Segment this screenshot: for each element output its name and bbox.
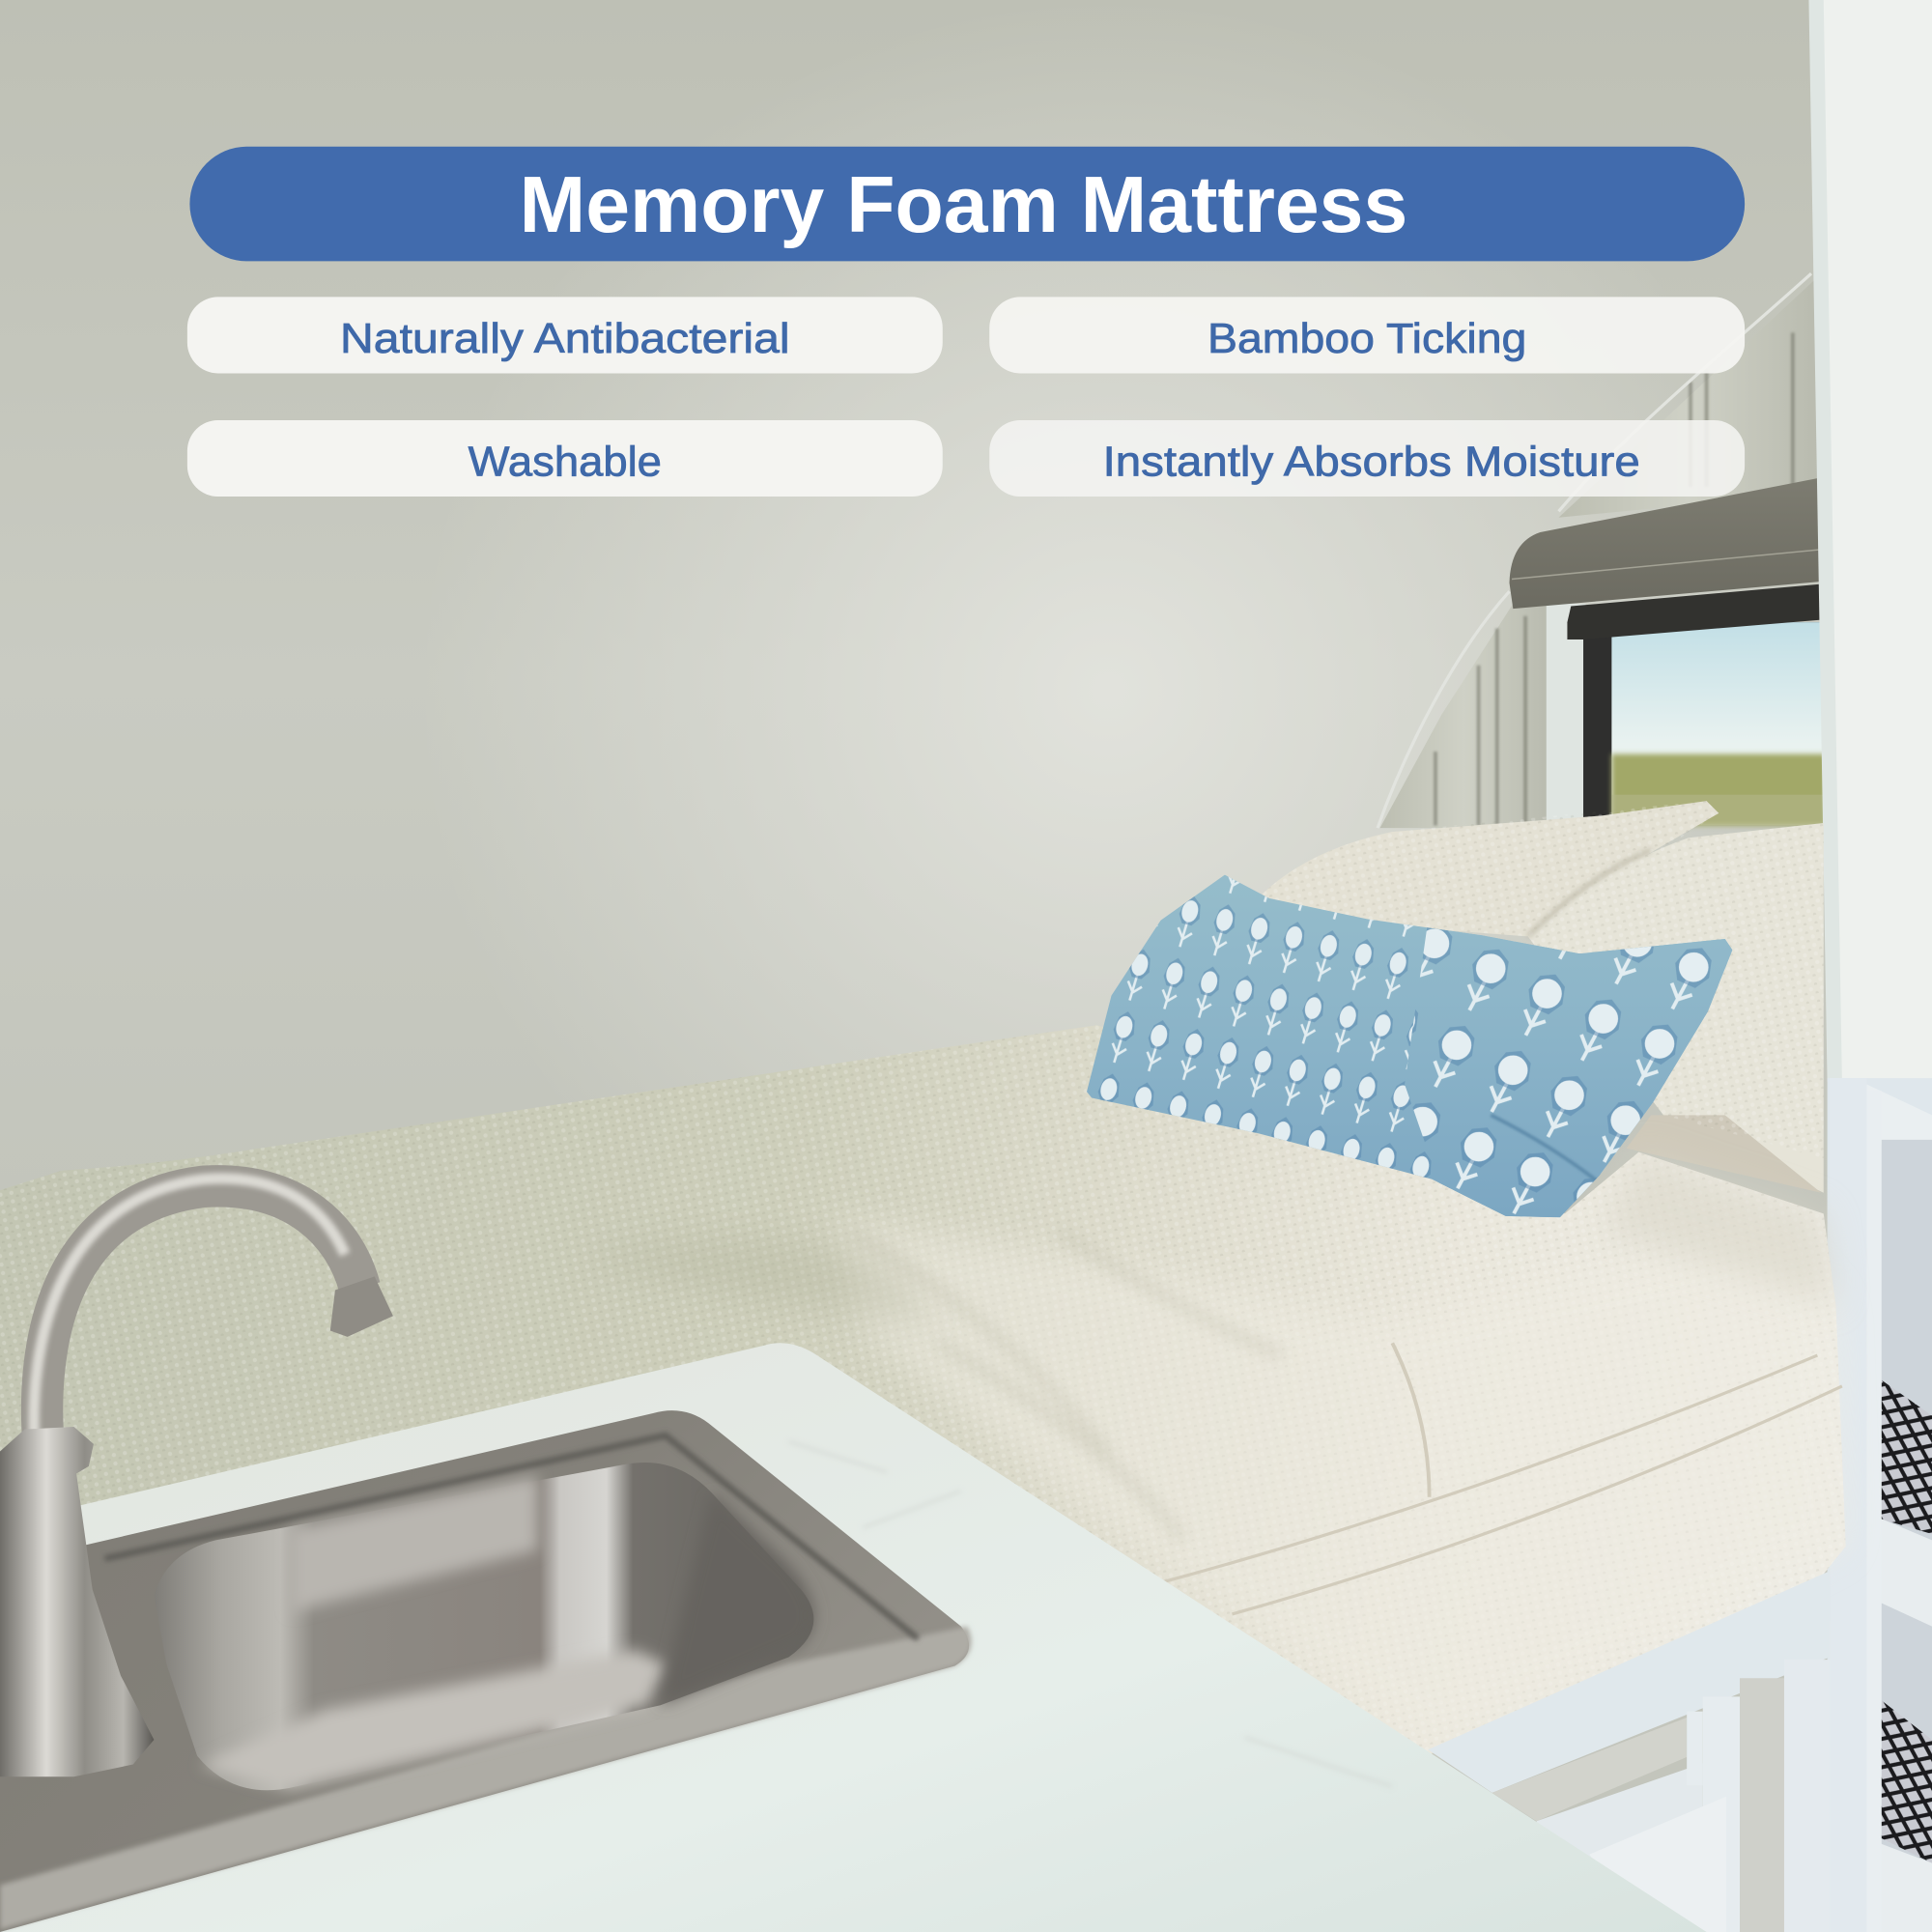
stainless sink	[0, 1410, 972, 1932]
bedding and mattress	[0, 1025, 1846, 1786]
faucet	[0, 1179, 393, 1776]
feature pill: Washable: Washable	[469, 439, 662, 485]
wood panel behind the sloped wall	[1380, 277, 1817, 832]
right cabinet	[1808, 0, 1932, 1932]
feature pill: Instantly Absorbs Moisture	[989, 420, 1745, 497]
feature pill: Washable	[187, 420, 943, 497]
title text: Memory Foam Mattress	[520, 159, 1407, 249]
back pillows	[1260, 801, 1824, 1193]
title bar	[189, 147, 1745, 261]
feature pill: Naturally Antibacterial: Naturally Antibacterial	[340, 316, 790, 362]
window with landscape	[1583, 622, 1826, 826]
feature pill: Instantly Absorbs Moisture: Instantly Absorbs Moisture	[1103, 439, 1640, 485]
white marble counter	[0, 1343, 1707, 1932]
bed base and drawers	[1428, 1571, 1830, 1932]
feature pill: Naturally Antibacterial	[187, 297, 943, 373]
sink basin	[154, 1463, 813, 1790]
blue patterned pillow	[1084, 868, 1737, 1226]
window shade and dark roller	[1509, 478, 1821, 639]
feature pill: Bamboo Ticking: Bamboo Ticking	[1208, 316, 1526, 362]
feature pill: Bamboo Ticking	[989, 297, 1745, 373]
sloped wall edge highlight	[1378, 273, 1811, 828]
